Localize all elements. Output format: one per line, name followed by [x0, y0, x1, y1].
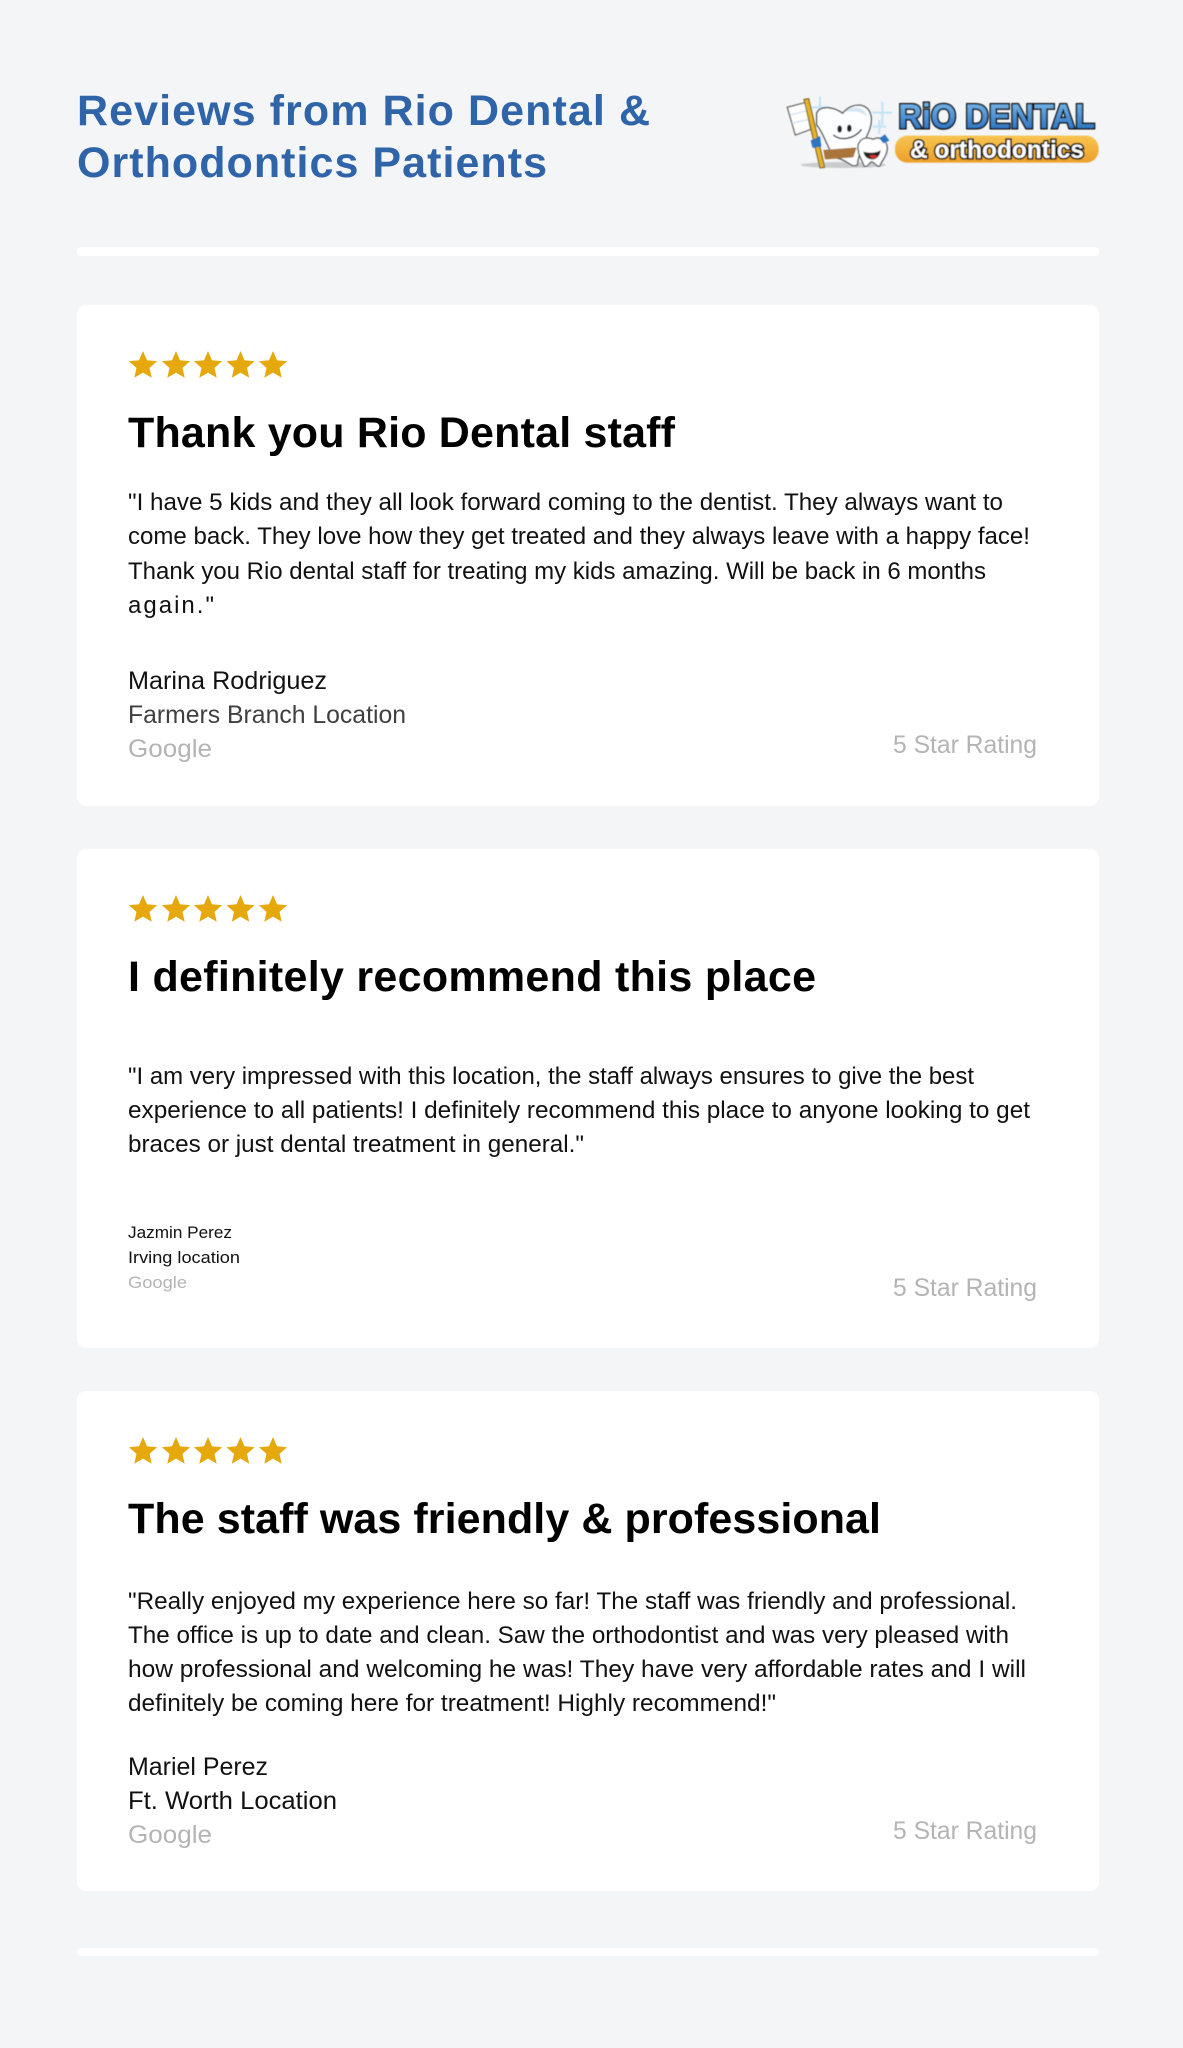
review text: Thank you Rio dental staff for treating my kids amazing. Will be back in 6 months — [128, 558, 986, 585]
logo: Rio Dental & orthodontics: RiO DENTAL — [898, 98, 1095, 136]
bottom divider — [77, 1948, 1099, 1956]
reviewer details — [128, 667, 406, 763]
logo: Rio Dental & orthodontics: & orthodontics — [910, 136, 1084, 164]
review text — [128, 1063, 1030, 1158]
review text: "I am very impressed with this location, the staff always ensures to give the best — [128, 1063, 974, 1090]
reviewer details: Irving location — [128, 1249, 240, 1267]
panel: review 2 — [77, 849, 1099, 1348]
reviewer details: Ft. Worth Location — [128, 1787, 337, 1815]
reviewer details: Google — [128, 1821, 212, 1849]
reviewer details: Marina Rodriguez — [128, 667, 327, 695]
title: Orthodontics Patients — [77, 139, 547, 187]
review text: "Really enjoyed my experience here so far! The staff was friendly and professional. — [128, 1588, 1017, 1615]
review text: definitely be coming here for treatment! Highly recommend!" — [128, 1690, 776, 1717]
rating label: 5 Star Rating — [893, 731, 1037, 759]
top divider — [77, 247, 1099, 256]
review text — [128, 1588, 1026, 1717]
heading: Thank you Rio Dental staff — [128, 409, 676, 457]
icon: five stars — [129, 351, 287, 378]
reviewer details: Mariel Perez — [128, 1753, 268, 1781]
reviewer details: Google — [128, 1274, 187, 1292]
review text: come back. They love how they get treated and they always leave with a happy face! — [128, 523, 1030, 550]
reviewer details: Google — [128, 735, 212, 763]
reviewer details — [128, 1224, 240, 1292]
reviewer details: Jazmin Perez — [128, 1224, 232, 1242]
title: Reviews from Rio Dental & — [77, 87, 650, 135]
review text — [128, 489, 1030, 619]
heading: I definitely recommend this place — [128, 953, 816, 1001]
logo: Rio Dental & orthodontics — [787, 97, 1099, 168]
review text: experience to all patients! I definitely recommend this place to anyone looking to get — [128, 1097, 1030, 1124]
reviewer details — [128, 1753, 337, 1849]
review text: "I have 5 kids and they all look forward coming to the dentist. They always want to — [128, 489, 1003, 516]
reviewer details: Farmers Branch Location — [128, 701, 406, 729]
icon: five stars — [129, 895, 287, 922]
review text: how professional and welcoming he was! They have very affordable rates and I will — [128, 1656, 1026, 1683]
rating label: 5 Star Rating — [893, 1274, 1037, 1302]
panel: review 1 — [77, 305, 1099, 806]
review text: The office is up to date and clean. Saw the orthodontist and was very pleased with — [128, 1622, 1009, 1649]
panel: review 3 — [77, 1391, 1099, 1891]
review text: braces or just dental treatment in general." — [128, 1131, 584, 1158]
review text: again." — [128, 592, 214, 619]
title — [77, 87, 650, 187]
icon: five stars — [129, 1437, 287, 1464]
heading: The staff was friendly & professional — [128, 1495, 881, 1543]
rating label: 5 Star Rating — [893, 1817, 1037, 1845]
